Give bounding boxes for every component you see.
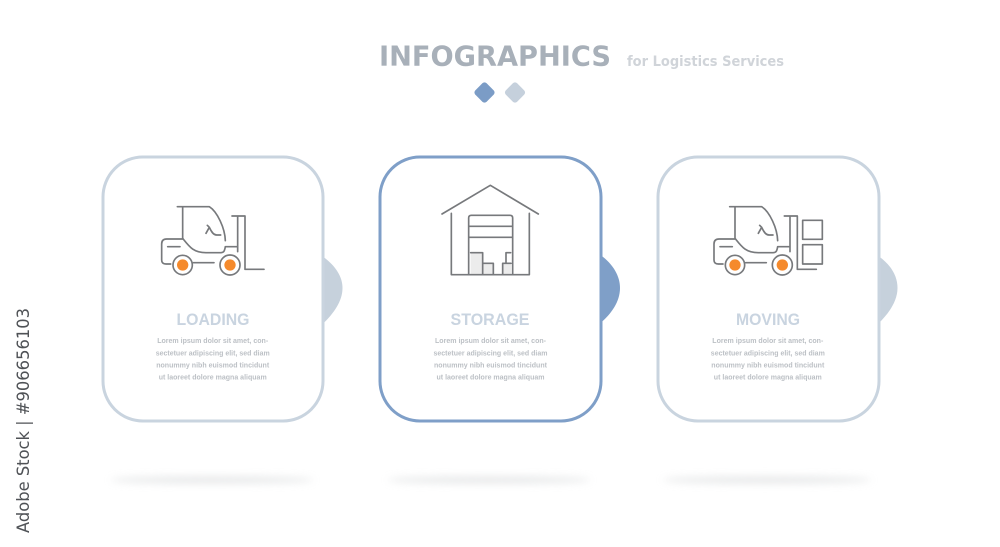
text block: storage: ut laoreet dolore magna aliquam: [436, 373, 545, 382]
text block: loading: ut laoreet dolore magna aliquam: [159, 373, 267, 382]
text block: moving: [711, 336, 825, 382]
title: INFOGRAPHICS: [379, 40, 611, 72]
tab: moving: [879, 256, 898, 323]
text block: storage: nonummy nibh euismod tincidunt: [434, 360, 547, 370]
text block: moving: sectetuer adipiscing elit, sed diam: [711, 348, 825, 357]
tab: loading: [323, 256, 342, 324]
text block: moving: ut laoreet dolore magna aliquam: [714, 373, 822, 382]
subtitle: for Logistics Services: [627, 54, 784, 70]
ground shadows: [110, 476, 872, 484]
heading: loading: LOADING: [176, 311, 250, 329]
panel: moving: [658, 157, 898, 421]
icon: forklift: [162, 207, 264, 275]
heading: moving: MOVING: [736, 311, 800, 329]
text block: storage: sectetuer adipiscing elit, sed diam: [434, 348, 548, 357]
text block: loading: Lorem ipsum dolor sit amet, con-: [157, 336, 269, 345]
text block: loading: sectetuer adipiscing elit, sed diam: [156, 348, 270, 357]
panel: loading: [103, 157, 342, 421]
icon: forklift with boxes: [714, 207, 822, 275]
card: storage: [380, 157, 601, 421]
text block: loading: [156, 336, 270, 382]
text block: storage: Lorem ipsum dolor sit amet, con-: [435, 336, 546, 345]
text block: moving: Lorem ipsum dolor sit amet, con-: [712, 336, 824, 345]
tab: storage: [600, 255, 620, 323]
side credit text: Adobe Stock | #906656103: [14, 308, 34, 533]
card: moving: [658, 157, 879, 421]
text block: moving: nonummy nibh euismod tincidunt: [711, 360, 825, 370]
icon: warehouse: [442, 185, 538, 275]
text block: storage: [434, 336, 548, 382]
text block: loading: nonummy nibh euismod tincidunt: [156, 360, 270, 370]
diamond indicators: [473, 81, 526, 104]
heading: storage: STORAGE: [450, 311, 530, 329]
panel: storage: [380, 157, 620, 421]
card: loading: [103, 157, 323, 421]
